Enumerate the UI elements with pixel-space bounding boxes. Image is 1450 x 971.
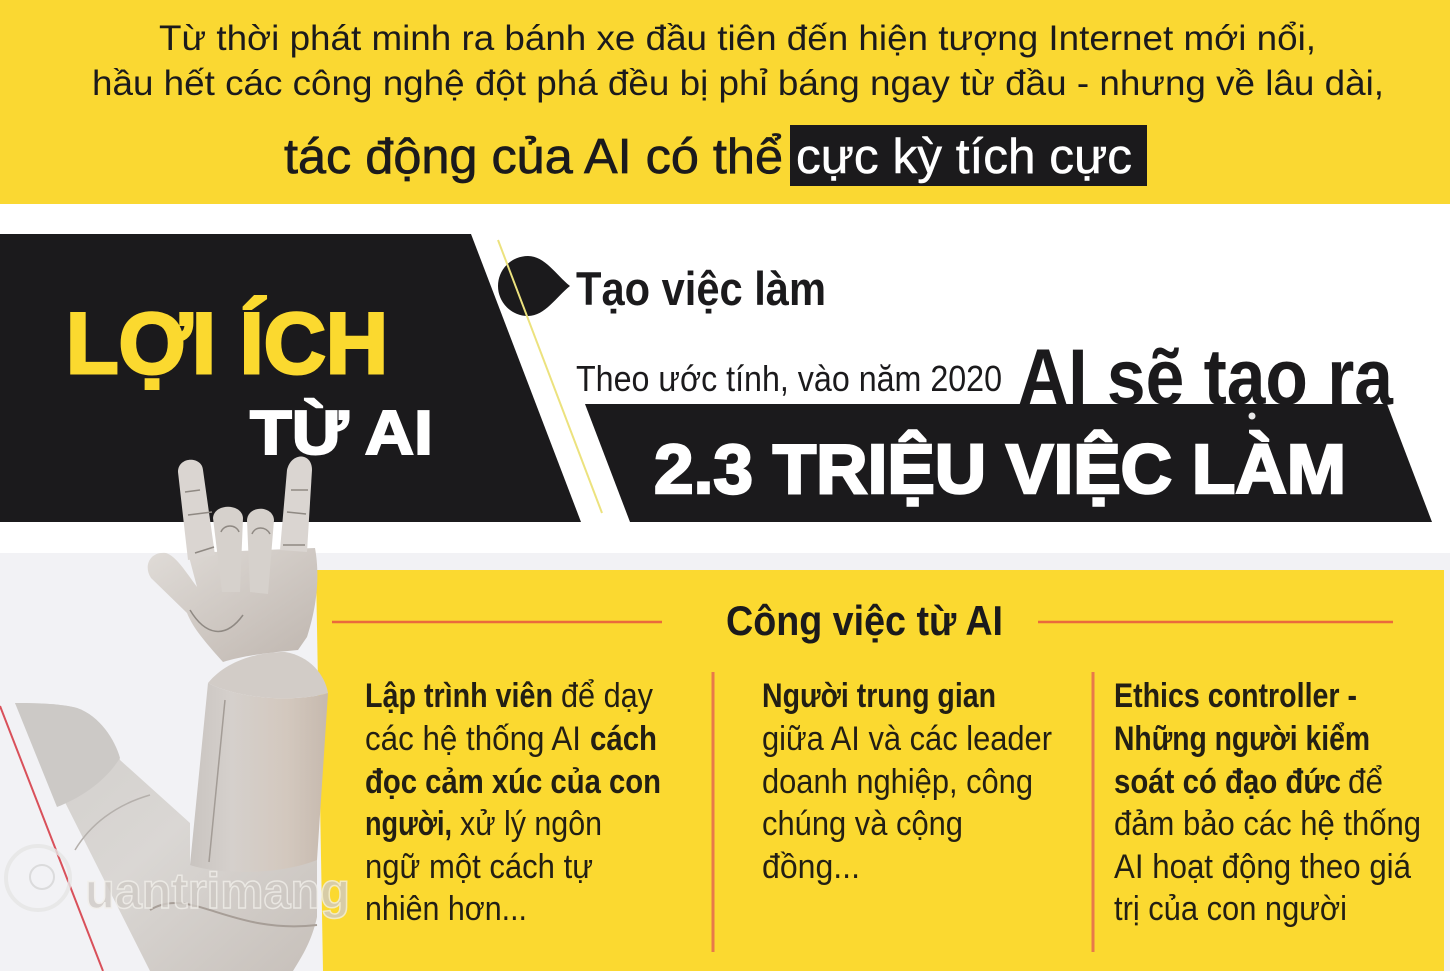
panel: title black shape: TỪ AI (250, 399, 433, 468)
banner: 2.3 triệu việc làm: 2.3 TRIỆU VIỆC LÀM (654, 429, 1346, 508)
column 1 text: ngữ một cách tự (365, 848, 593, 886)
intro text block (92, 19, 1384, 184)
column 3 text: AI hoạt động theo giá (1114, 848, 1411, 886)
highlight: cực kỳ tích cực: cực kỳ tích cực (796, 130, 1132, 184)
text: AI sẽ tạo ra: AI sẽ tạo ra (1018, 332, 1394, 421)
intro text block: Từ thời phát minh ra bánh xe đầu tiên đến hiện tượng Internet mới nổi, (159, 19, 1316, 58)
column 3 text: soát có đạo đức (1114, 763, 1341, 801)
column 2 text: chúng và cộng (762, 805, 963, 843)
column 3 text: Những người kiểm (1114, 720, 1370, 758)
column 1 text: cách (590, 720, 657, 758)
intro text block: tác động của AI có thể (284, 130, 783, 184)
column 1 text: các hệ thống AI (365, 720, 581, 758)
column 3 text: để (1348, 763, 1383, 801)
divider 1 (712, 672, 714, 952)
column 1 text (365, 677, 661, 928)
column 3 text (1114, 677, 1421, 928)
yellow diagonal line (498, 240, 602, 513)
upper arm (15, 703, 317, 971)
watermark: Quantrimang (6, 846, 350, 919)
grey lower background (0, 553, 1450, 971)
background: top yellow banner (0, 0, 1450, 204)
column 1 text: nhiên hơn... (365, 890, 527, 928)
forearm (190, 683, 328, 872)
panel: title black shape (0, 234, 581, 522)
fingers (178, 460, 215, 560)
column 1 text: để dạy (561, 677, 653, 715)
panel: jobs from AI (316, 570, 1444, 971)
banner: 2.3 triệu việc làm (585, 404, 1432, 522)
column 1 text: người, (365, 805, 452, 843)
icon: robot arm (15, 456, 328, 971)
column 2 text: Người trung gian (762, 677, 996, 715)
column 1 text: Lập trình viên (365, 677, 553, 715)
icon: teardrop bullet (498, 256, 570, 316)
heading: Tạo việc làm: Tạo việc làm (576, 262, 826, 315)
divider 2 (1092, 672, 1094, 952)
column 2 text: giữa AI và các leader (762, 720, 1052, 758)
intro text block: hầu hết các công nghệ đột phá đều bị phỉ báng ngay từ đầu - nhưng về lâu dài, (92, 64, 1384, 103)
wrist dome (208, 652, 328, 698)
column 3 text: đảm bảo các hệ thống (1114, 805, 1421, 843)
palm and thumb (148, 548, 317, 662)
column 3 text: Ethics controller - (1114, 677, 1357, 715)
column 2 text (762, 677, 1052, 886)
column 1 text: đọc cảm xúc của con (365, 763, 661, 801)
column 1 text: xử lý ngôn (460, 805, 602, 843)
column 2 text: doanh nghiệp, công (762, 763, 1033, 801)
text: Theo ước tính: Theo ước tính, vào năm 2020 (576, 358, 1002, 399)
heading: Công việc từ AI: Công việc từ AI (726, 597, 1003, 644)
column 2 text: đồng... (762, 848, 860, 886)
red diagonal line (0, 706, 103, 971)
column 3 text: trị của con người (1114, 890, 1347, 928)
panel: title black shape: LỢI ÍCH (66, 296, 388, 392)
watermark: Quantrimang: uantrimang (85, 863, 350, 919)
